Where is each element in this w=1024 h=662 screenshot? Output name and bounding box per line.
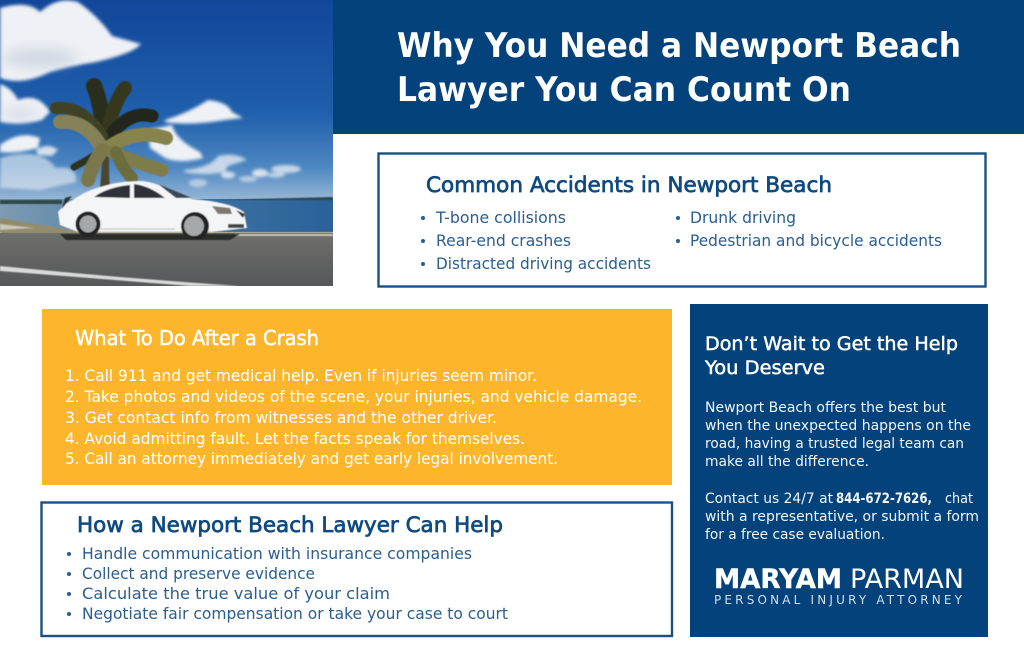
header banner xyxy=(333,0,1024,134)
list: lawyer services xyxy=(67,544,508,623)
list: lawyer services: Collect and preserve evidence xyxy=(82,564,315,583)
list: accident types: Drunk driving xyxy=(690,208,796,227)
numbered steps: 4. Avoid admitting fault. Let the facts speak for themselves. xyxy=(65,429,525,448)
list: lawyer services: Negotiate fair compensation or take your case to court xyxy=(82,604,508,623)
panel: what to do after a crash xyxy=(42,309,672,485)
numbered steps xyxy=(65,366,642,468)
paragraph: contact: with a representative, or submit a form xyxy=(705,509,979,525)
heading: don't wait xyxy=(704,333,958,379)
panel: common accidents xyxy=(378,154,986,286)
paragraph: intro: make all the difference. xyxy=(705,454,869,470)
paragraph: intro: road, having a trusted legal team can xyxy=(705,436,964,452)
paragraph: intro: Newport Beach offers the best but xyxy=(705,400,947,416)
heading: don't wait: You Deserve xyxy=(704,357,825,379)
paragraph: contact: 844-672-7626, xyxy=(836,491,932,507)
paragraph: contact: for a free case evaluation. xyxy=(705,527,885,543)
photo: white car and palm tree by the water xyxy=(0,0,333,286)
heading: common accidents: Common Accidents in Newport Beach xyxy=(426,173,832,197)
list: accident types: Pedestrian and bicycle accidents xyxy=(690,231,942,250)
title xyxy=(397,26,961,110)
list: accident types xyxy=(421,208,942,273)
paragraph: intro xyxy=(705,400,971,470)
numbered steps: 5. Call an attorney immediately and get early legal involvement. xyxy=(65,449,558,468)
list: accident types: T-bone collisions xyxy=(435,208,566,227)
logo: Maryam Parman: MARYAM xyxy=(714,564,842,595)
logo: Maryam Parman xyxy=(714,564,964,607)
title: Lawyer You Can Count On xyxy=(397,70,851,110)
numbered steps: 1. Call 911 and get medical help. Even if injuries seem minor. xyxy=(65,366,537,385)
panel: don't wait sidebar xyxy=(690,304,988,637)
paragraph: intro: when the unexpected happens on the xyxy=(705,418,971,434)
numbered steps: 2. Take photos and videos of the scene, your injuries, and vehicle damage. xyxy=(65,387,642,406)
heading: don't wait: Don’t Wait to Get the Help xyxy=(705,333,958,355)
logo: Maryam Parman: PARMAN xyxy=(850,564,964,595)
list: accident types: Rear-end crashes xyxy=(436,231,571,250)
heading: what to do: What To Do After a Crash xyxy=(75,326,319,350)
paragraph: contact: chat xyxy=(945,491,973,507)
paragraph: contact xyxy=(705,491,979,543)
list: lawyer services: Calculate the true value of your claim xyxy=(82,584,390,603)
palm tree xyxy=(56,86,166,190)
title: Why You Need a Newport Beach xyxy=(397,26,961,66)
list: lawyer services: Handle communication with insurance companies xyxy=(82,544,472,563)
panel: how a lawyer can help xyxy=(42,502,672,636)
car xyxy=(58,181,247,240)
logo: Maryam Parman: PERSONAL INJURY ATTORNEY xyxy=(714,593,963,607)
heading: how a lawyer can help: How a Newport Beach Lawyer Can Help xyxy=(77,513,503,537)
list: accident types: Distracted driving accidents xyxy=(436,254,651,273)
paragraph: contact: Contact us 24/7 at xyxy=(705,491,833,507)
numbered steps: 3. Get contact info from witnesses and the other driver. xyxy=(65,408,497,427)
